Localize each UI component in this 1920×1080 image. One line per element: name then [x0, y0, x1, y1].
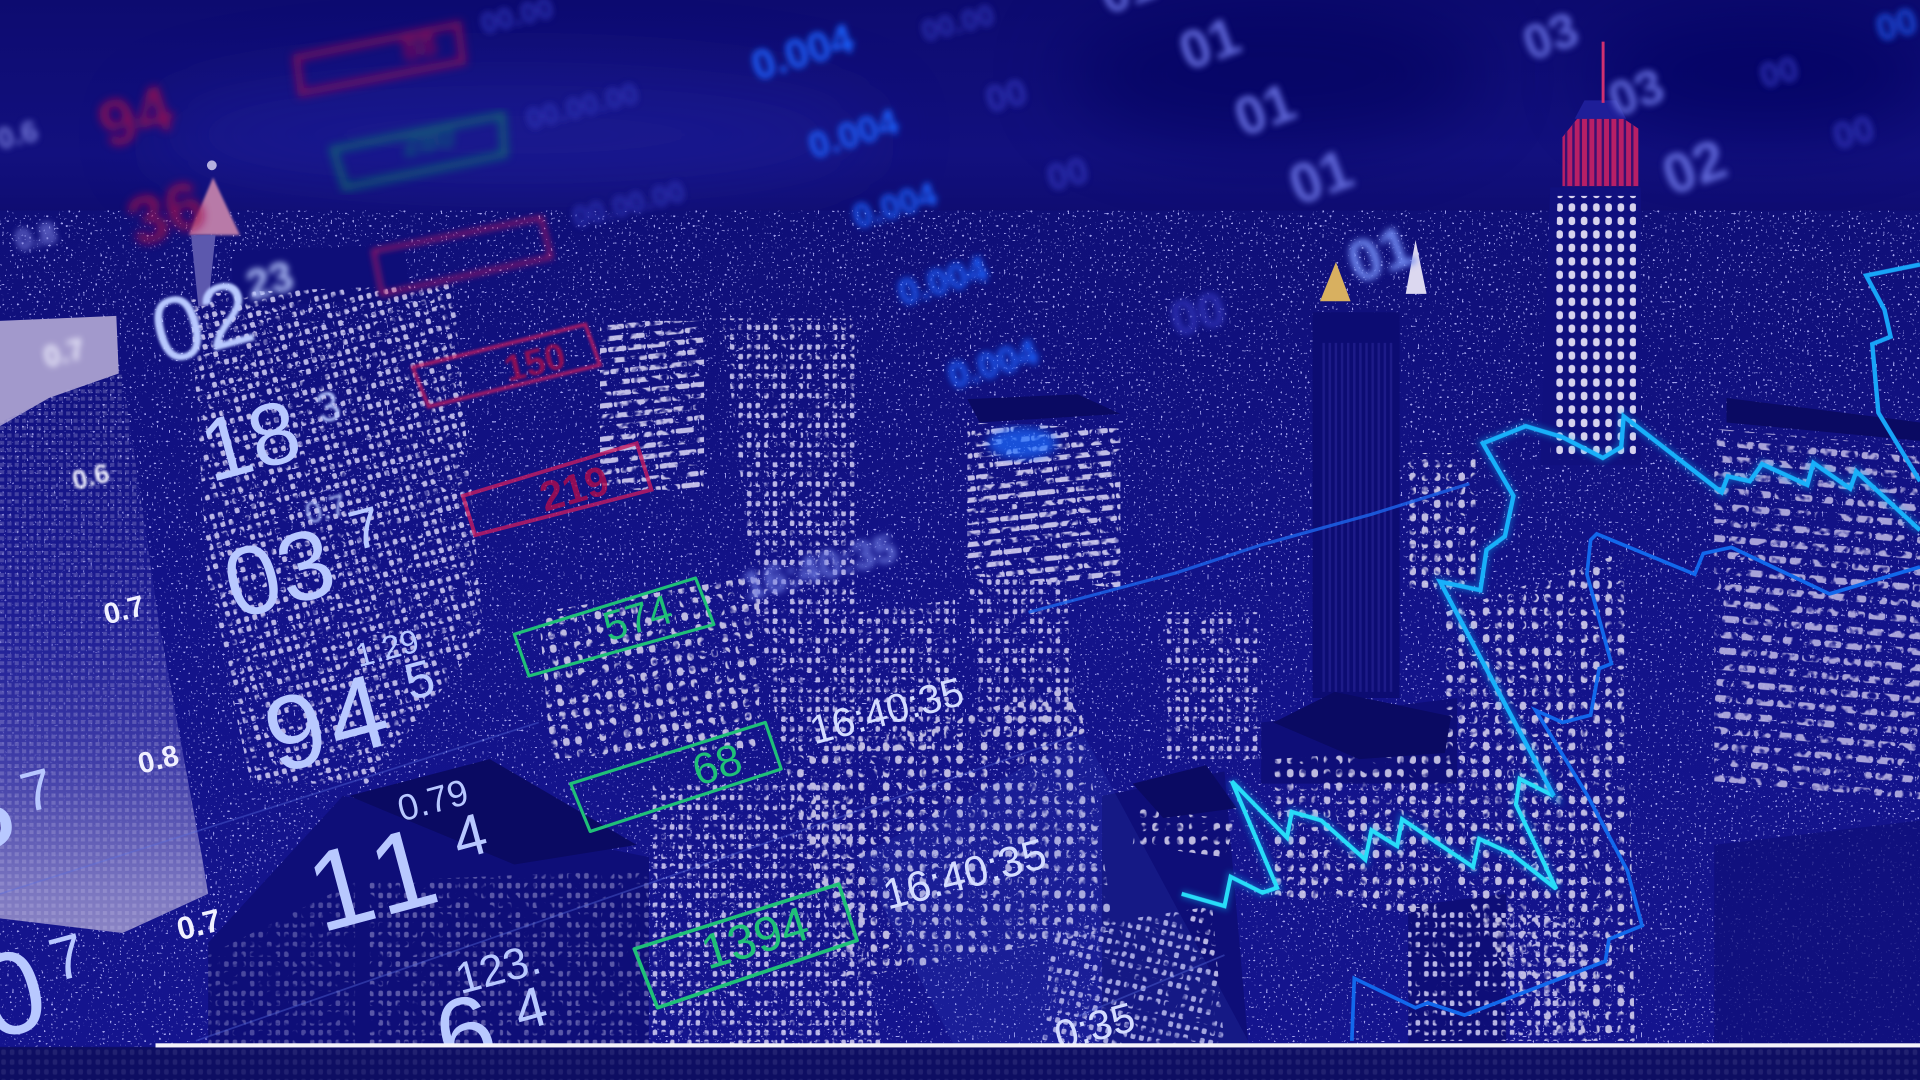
- green box 1394: 1394: [695, 897, 815, 980]
- blurred lavender figures: 03: [1602, 59, 1671, 128]
- icon: Empire State Building: [1540, 42, 1641, 465]
- blurred faint figures: 00: [1872, 0, 1920, 49]
- large pale-blue figures: 02: [141, 261, 264, 384]
- timestamps: 16:40:35: [878, 830, 1051, 919]
- timestamps: 16:40:35: [805, 668, 968, 753]
- large pale-blue figures: 94: [252, 650, 405, 796]
- large pale-blue figures: 7: [42, 920, 93, 995]
- white small values: 0.7: [100, 589, 148, 631]
- red value near: 219: [534, 456, 614, 520]
- blurred green box: 280: [398, 117, 457, 164]
- red figure 94: 94: [90, 70, 183, 164]
- green box 68: [571, 722, 781, 831]
- large pale-blue figures: 23: [241, 251, 298, 309]
- blurred lavender figures: [1093, 0, 1734, 296]
- large pale-blue figures: 3: [311, 381, 346, 432]
- large pale-blue figures: 18: [190, 380, 310, 501]
- large pale-blue figures: 5: [398, 648, 441, 711]
- city base: [0, 211, 1920, 1048]
- blurred faint figures: 00: [1165, 282, 1231, 347]
- red value middle: 150: [500, 335, 570, 390]
- blurred faint figures: 00: [1043, 149, 1092, 199]
- bottom strip: [0, 1047, 1920, 1080]
- white small values: [40, 332, 225, 947]
- red text upper: 88: [398, 25, 440, 68]
- large pale-blue figures: 11: [294, 799, 459, 956]
- large pale-blue figures: 0.79: [393, 771, 473, 829]
- green box 574: 574: [597, 585, 678, 650]
- lavender corner building: [0, 316, 208, 933]
- blurred bright-blue figures: 0.004: [893, 248, 993, 314]
- blurred lavender figures: 01: [1281, 136, 1361, 217]
- red box far: [373, 218, 551, 294]
- blurred faint figures: 00: [981, 71, 1031, 120]
- blurred red figures and boxes: [90, 24, 463, 262]
- timestamps: 0:35: [1049, 993, 1140, 1059]
- icon: Chrysler spire: [189, 160, 240, 306]
- blurred faint figures: 00.00: [918, 0, 998, 48]
- blurred faint figures: 00.00.00: [523, 77, 642, 137]
- timestamps: [738, 527, 1140, 1059]
- large pale-blue figures: 4: [507, 974, 554, 1043]
- green box 574: [514, 578, 714, 676]
- icon: gold and white spires: [1320, 240, 1427, 301]
- blurred lavender figures: 01: [1339, 213, 1423, 296]
- dark tower: [1313, 312, 1400, 698]
- large pale-blue figures: 03: [212, 505, 346, 640]
- white small values: 0.7: [40, 332, 88, 374]
- blurred lavender figures: 01: [1226, 72, 1303, 148]
- faint diagonal grid lines: [0, 722, 1224, 1041]
- large pale-blue figures: 4: [446, 801, 494, 872]
- large pale-blue figures: [0, 251, 554, 1080]
- blurred bright-blue figures: 0.004: [943, 331, 1043, 397]
- large pale-blue figures: 123.: [450, 934, 546, 1004]
- red box middle: [413, 324, 600, 407]
- blurred faint figures: 00.00.00: [569, 175, 688, 235]
- dark rooftops: [349, 394, 1920, 864]
- white small values: 0.6: [69, 457, 112, 496]
- timestamps: 16:40:35: [738, 527, 901, 609]
- blurred green box: [333, 115, 504, 187]
- large pale-blue figures: 1.29: [351, 623, 423, 675]
- blurred bright-blue figures: 0.004: [746, 14, 859, 89]
- green box 68: 68: [687, 734, 748, 796]
- buildings: [0, 245, 1920, 1053]
- large pale-blue figures: 7: [342, 494, 388, 563]
- white small values: 0.7: [173, 902, 225, 947]
- dark building masses: [208, 245, 1920, 1053]
- blurred faint figures: 00: [1756, 50, 1802, 96]
- window layers: [190, 284, 1920, 1047]
- red data boxes: [373, 218, 651, 535]
- blurred bright-blue figures: [746, 14, 1043, 397]
- red box near: [463, 443, 651, 535]
- large pale-blue figures: 0.7: [302, 488, 350, 531]
- line chart: dim blue trend line: [1029, 484, 1920, 1041]
- blurred bright-blue figures: 0.004: [848, 175, 941, 237]
- blurred lavender figures: 03: [1516, 2, 1586, 72]
- blurred lavender figures: 01: [1171, 5, 1248, 82]
- large pale-blue figures: 7: [14, 756, 60, 825]
- blurred faint figures: 0.8: [12, 216, 60, 258]
- red box upper: [296, 24, 463, 93]
- building highlights: [988, 427, 1057, 459]
- white small values: 0.8: [135, 739, 182, 781]
- sky background: [0, 0, 1920, 220]
- green data boxes: [514, 578, 857, 1008]
- glass panel reflection: [857, 735, 1251, 1047]
- blurred bright-blue figures: 0.004: [803, 101, 904, 167]
- blurred faint figures: 00: [1829, 107, 1878, 157]
- blurred lavender figures: 02: [1654, 127, 1734, 207]
- line chart: bright cyan price line: [1182, 264, 1920, 906]
- red figure 36: 36: [118, 165, 214, 262]
- green box 1394: [634, 884, 857, 1008]
- blurred faint figures: [0, 0, 1920, 347]
- white baseline rule: [156, 1043, 1920, 1047]
